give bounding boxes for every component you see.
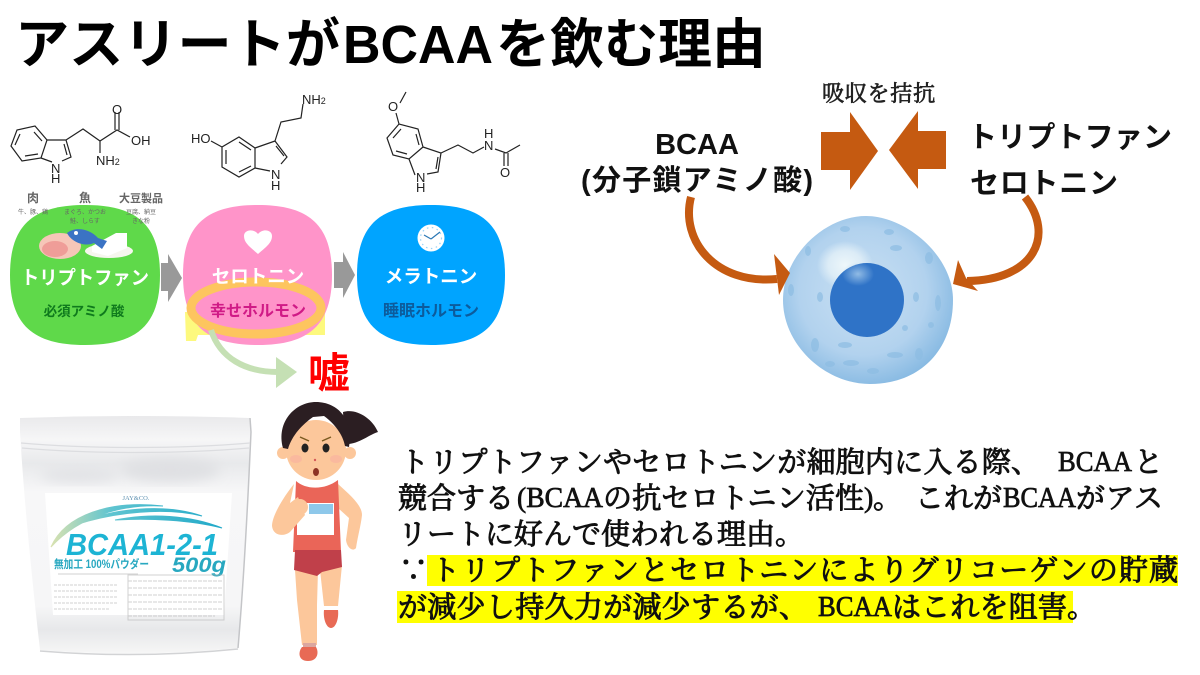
title: [15, 15, 766, 75]
back leg: [320, 565, 342, 606]
arrow: tryptophan to serotonin: [161, 254, 182, 302]
shorts: [294, 550, 342, 576]
label: BCAA: [581, 129, 813, 197]
arrow: block left: [889, 111, 946, 189]
hair: [282, 402, 350, 449]
face: [286, 420, 346, 480]
explanation text: [398, 446, 1178, 624]
molecule: serotonin: NH2: [302, 92, 326, 107]
molecule: melatonin: [387, 92, 520, 195]
explanation text: はこれを阻害。: [892, 591, 1096, 624]
molecule: serotonin: [191, 92, 326, 193]
molecule: serotonin: N: [271, 167, 280, 182]
product: BCAA bag: [20, 416, 251, 655]
explanation text: (BCAA: [517, 483, 604, 514]
panel: serotonin: 幸せホルモン: [210, 302, 306, 320]
molecule: tryptophan: N: [51, 161, 60, 176]
ears: [277, 447, 289, 459]
explanation text: トリプトファンとセロトニンによりグリコーゲンの貯蔵: [431, 554, 1178, 587]
molecule: melatonin: H: [416, 180, 425, 195]
front arm: [272, 484, 305, 535]
weight: 500g: [172, 554, 226, 577]
food labels: 牛、豚、鶏: [18, 208, 48, 216]
food labels: [18, 190, 163, 225]
molecule: melatonin: O: [388, 99, 398, 114]
molecule: tryptophan: H: [51, 171, 60, 186]
explanation text: ): [864, 483, 873, 514]
label: tryptophan serotonin: トリプトファン: [968, 121, 1172, 154]
food labels: 大豆製品: [119, 191, 163, 205]
panel: melatonin: [357, 205, 505, 345]
highlight: line 5: [397, 591, 1073, 623]
panel: serotonin: [183, 205, 332, 345]
molecule: tryptophan: O: [112, 102, 122, 117]
back arm: [338, 484, 362, 550]
label: lie: 嘘: [308, 350, 350, 397]
explanation text: がアス: [1076, 483, 1163, 515]
explanation text: BCAA: [1003, 483, 1077, 514]
molecule: melatonin: N: [484, 138, 493, 153]
fine print: [54, 574, 224, 620]
illustration: runner: [272, 402, 378, 661]
torso: [293, 480, 341, 552]
label: tryptophan serotonin: セロトニン: [970, 168, 1118, 200]
explanation text: トリプトファンやセロトニンが細胞内に入る際、: [400, 446, 1040, 479]
panel: tryptophan: [10, 190, 163, 345]
panel: tryptophan: 必須アミノ酸: [44, 303, 125, 319]
molecule: tryptophan: OH: [131, 133, 150, 148]
food labels: 肉: [27, 190, 39, 205]
facial features: [290, 437, 342, 476]
title: BCAA: [343, 15, 493, 75]
icon: clock: [418, 224, 444, 252]
panel: tryptophan: トリプトファン: [21, 267, 149, 289]
label: tryptophan serotonin: [968, 121, 1172, 200]
panel: serotonin: セロトニン: [212, 266, 304, 287]
ponytail: [343, 411, 378, 444]
front leg: [295, 570, 318, 645]
text: 吸収を拮抗: 吸収を拮抗: [822, 81, 935, 106]
molecule: tryptophan: [11, 102, 150, 186]
arrow: serotonin to melatonin: [334, 252, 355, 298]
label: BCAA: BCAA: [655, 129, 739, 161]
yellow highlight behind serotonin: [185, 312, 325, 341]
panel: melatonin: メラトニン: [385, 266, 477, 287]
molecule: melatonin: H: [484, 126, 493, 141]
explanation text: と: [1134, 447, 1163, 479]
arrow: BCAA to cell: [689, 197, 790, 295]
molecule: melatonin: O: [500, 165, 510, 180]
title: アスリートが: [15, 15, 340, 75]
bib: [297, 503, 334, 535]
brand: JAY&CO.: [122, 495, 150, 502]
explanation text: ∵: [399, 555, 428, 587]
subtitle: 無加工 100%パウダー: [54, 557, 149, 571]
explanation text: 競合する: [398, 482, 514, 515]
molecule: serotonin: H: [271, 178, 280, 193]
explanation text: BCAA: [818, 592, 893, 623]
title: を飲む理由: [496, 15, 766, 75]
illustration: cell: [783, 216, 953, 384]
explanation text: が減少し持久力が減少するが、: [398, 591, 808, 624]
molecule: serotonin: HO: [191, 131, 210, 146]
molecule: tryptophan: NH2: [96, 153, 120, 168]
food labels: 豆腐、納豆: [126, 208, 156, 216]
nucleus: [830, 263, 904, 337]
explanation text: BCAA: [1058, 447, 1133, 478]
highlight ring: [191, 282, 321, 334]
food labels: 魚: [79, 190, 91, 205]
explanation text: 。: [873, 483, 902, 515]
explanation text: の抗セロトニン活性: [603, 482, 864, 515]
icon: ham: [39, 233, 81, 259]
food labels: 鮭、しらす: [70, 217, 100, 225]
swoosh: [51, 505, 222, 547]
arrow: block right: [821, 112, 878, 190]
product name: BCAA1-2-1: [66, 527, 218, 562]
label: BCAA: (分子鎖アミノ酸): [581, 164, 813, 197]
molecule: melatonin: N: [416, 170, 425, 185]
arrow: tryptophan to cell: [953, 197, 1039, 291]
icon: tofu: [85, 233, 133, 258]
food labels: きな粉: [132, 217, 150, 225]
icon: heart: [244, 230, 272, 254]
explanation text: これが: [915, 483, 1002, 515]
explanation text: リートに好んで使われる理由。: [398, 518, 804, 551]
icon: fish: [67, 229, 107, 249]
food labels: まぐろ、かつお: [64, 209, 106, 216]
highlight: line 4: [427, 555, 1178, 586]
panel: melatonin: 睡眠ホルモン: [383, 302, 479, 320]
arrow: green curved: [211, 330, 297, 388]
